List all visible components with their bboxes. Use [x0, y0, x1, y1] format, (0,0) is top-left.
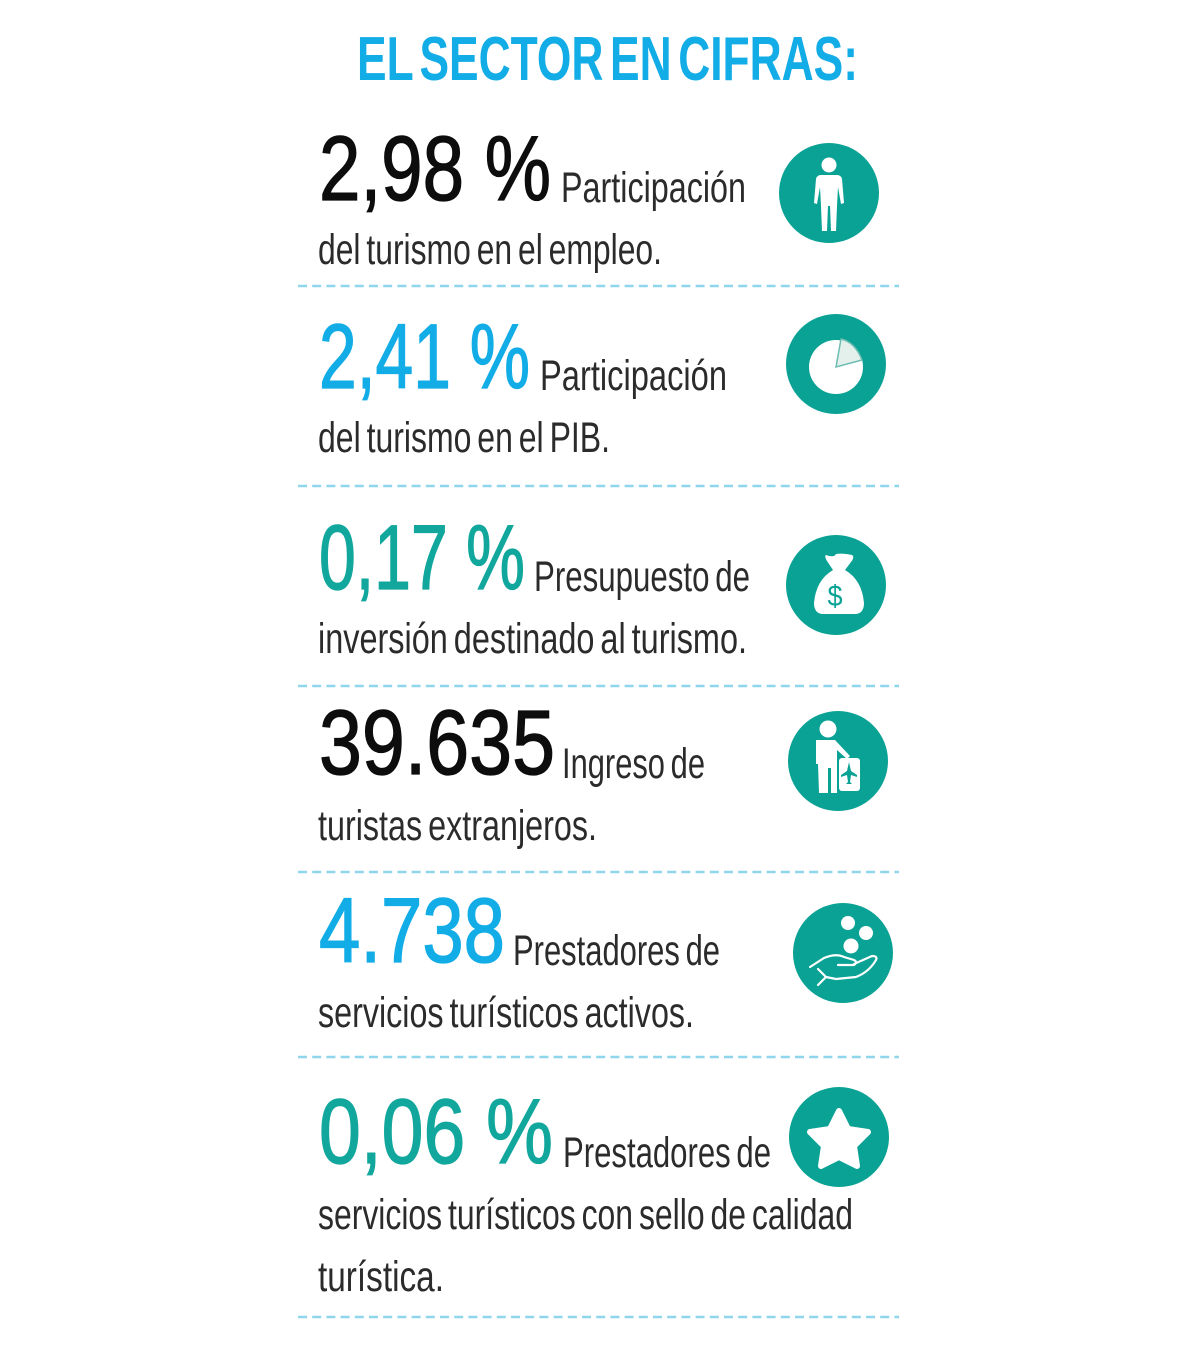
text: participación empleo: Participación	[561, 164, 746, 212]
title: EL SECTOR EN CIFRAS:	[357, 25, 858, 94]
stat: presupuesto	[318, 507, 886, 663]
icon: pie chart	[786, 314, 886, 414]
number: 4.738: 4.738	[319, 880, 505, 982]
text: presupuesto: inversión destinado al turismo.	[318, 615, 747, 663]
text: turistas: turistas extranjeros.	[318, 802, 597, 850]
text: prestadores activos: Prestadores de	[513, 927, 720, 975]
number: 39.635: 39.635	[319, 692, 555, 794]
text: presupuesto: Presupuesto de	[534, 553, 750, 601]
text: prestadores activos: servicios turísticos activos.	[318, 989, 694, 1037]
icon: hand with coins	[793, 903, 893, 1003]
text: participación empleo: del turismo en el empleo.	[318, 226, 662, 274]
icon: person	[779, 143, 879, 243]
number: 0,06 %: 0,06 %	[319, 1081, 553, 1183]
text: participación PIB: del turismo en el PIB.	[318, 414, 610, 462]
stat: empleo	[318, 118, 879, 274]
stat: sello de calidad	[318, 1081, 889, 1301]
number: 2,41 %: 2,41 %	[319, 306, 530, 408]
icon: money bag: $	[828, 580, 843, 613]
icon: star	[789, 1087, 889, 1187]
text: sello de calidad: Prestadores de	[563, 1129, 771, 1177]
stat: prestadores activos	[318, 880, 893, 1037]
number: 2,98 %: 2,98 %	[319, 118, 551, 220]
text: sello de calidad: servicios turísticos con sello de calidad	[318, 1191, 853, 1239]
stat: PIB	[318, 306, 886, 462]
text: sello de calidad: turística.	[318, 1253, 444, 1301]
icon: traveller with suitcase	[788, 711, 888, 811]
text: participación PIB: Participación	[540, 352, 727, 400]
icon: money bag	[786, 535, 886, 635]
number: 0,17 %: 0,17 %	[319, 507, 525, 609]
stat: turistas	[318, 692, 888, 850]
text: turistas: Ingreso de	[562, 740, 705, 788]
